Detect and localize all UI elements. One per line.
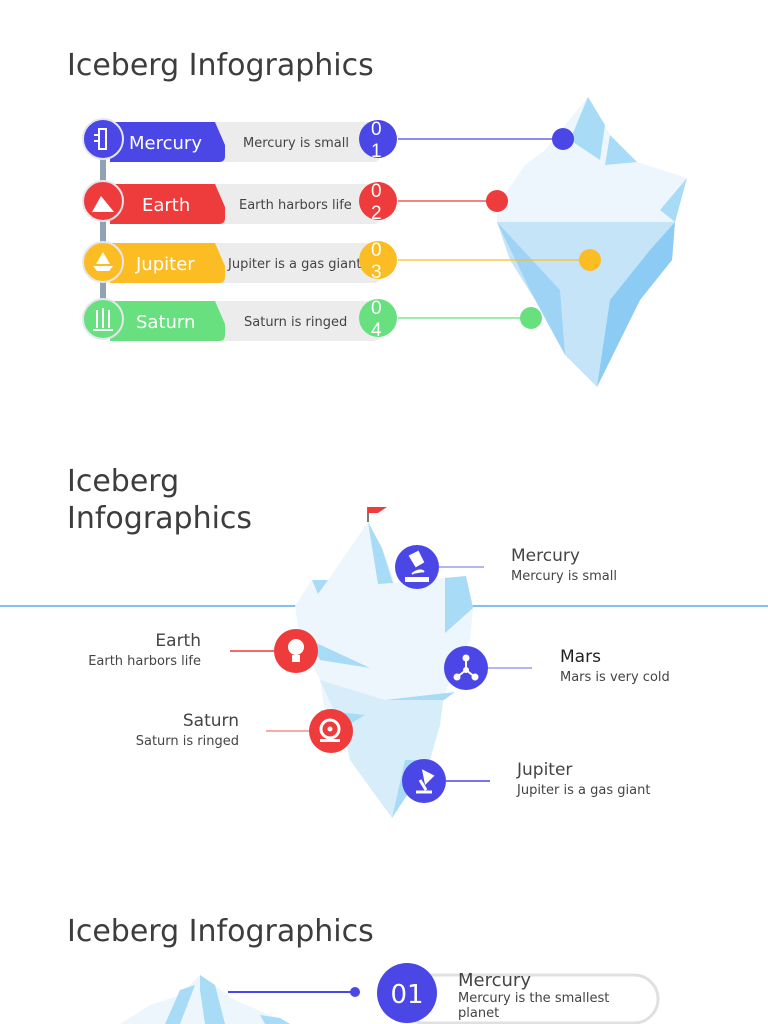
text: Mars: Mars xyxy=(560,647,601,667)
row: Mercury: 0 xyxy=(371,119,382,140)
row lines xyxy=(398,138,563,140)
row: Mercury: Mercury is small xyxy=(243,136,349,151)
row: Jupiter: Jupiter is a gas giant xyxy=(227,257,361,272)
row: Jupiter: 0 xyxy=(371,240,382,261)
water line xyxy=(0,605,768,607)
text: Jupiter: Jupiter xyxy=(517,760,572,780)
row: Saturn xyxy=(83,298,397,341)
panel: iceberg 2 xyxy=(0,507,768,818)
title 2 xyxy=(67,464,252,536)
text: Mercury 3 xyxy=(458,970,610,1021)
text: Mercury: Mercury xyxy=(511,546,580,566)
text: Earth: Earth xyxy=(155,631,201,651)
row: Jupiter: 3 xyxy=(371,262,382,283)
title 1: Iceberg Infographics xyxy=(67,48,374,83)
row: Mercury: Mercury xyxy=(129,133,202,154)
row: Earth: Earth harbors life xyxy=(239,198,352,213)
icon: bell xyxy=(309,709,353,753)
icon: molecule xyxy=(444,646,488,690)
title 2: Infographics xyxy=(67,501,252,536)
icon: bulb xyxy=(274,629,318,673)
iceberg peak xyxy=(120,975,290,1024)
icon: lamp xyxy=(402,759,446,803)
connector lines xyxy=(439,566,484,568)
row: Mercury: 1 xyxy=(371,141,382,162)
panel: iceberg 3 xyxy=(120,963,660,1024)
row: Earth: 0 xyxy=(371,181,382,202)
row: Saturn: 0 xyxy=(371,298,382,319)
text: Jupiter xyxy=(516,760,650,798)
text: Mercury xyxy=(511,546,617,584)
iceberg shape xyxy=(295,522,473,818)
row: Mercury xyxy=(83,119,397,162)
text: Saturn: Saturn xyxy=(183,711,239,731)
row: Saturn: 4 xyxy=(371,320,382,341)
panel: iceberg list 1 xyxy=(82,97,687,387)
text: Earth xyxy=(88,631,201,669)
row: Earth: Earth xyxy=(142,195,190,216)
text: Mars xyxy=(560,647,670,685)
number circle xyxy=(377,963,437,1023)
text: Jupiter: Jupiter is a gas giant xyxy=(517,783,650,798)
row: Saturn: Saturn is ringed xyxy=(244,315,347,330)
text: Mercury 3: Mercury is the smallest planet xyxy=(458,991,609,1021)
connector xyxy=(228,991,355,993)
text: Saturn: Saturn is ringed xyxy=(136,734,239,749)
pill xyxy=(400,975,658,1023)
text: Mercury 3: Mercury xyxy=(458,970,531,991)
text: Saturn xyxy=(136,711,239,749)
text: Mercury: Mercury is small xyxy=(511,569,617,584)
panel: iceberg 3: 01 xyxy=(390,980,424,1010)
title 3: Iceberg Infographics xyxy=(67,914,374,949)
row: Jupiter xyxy=(83,240,397,283)
connector line xyxy=(100,150,106,310)
row: Earth xyxy=(83,181,397,224)
row: Saturn: Saturn xyxy=(136,312,195,333)
text: Mars: Mars is very cold xyxy=(560,670,670,685)
text: Earth: Earth harbors life xyxy=(88,654,201,669)
icon: microscope xyxy=(395,545,439,589)
title 2: Iceberg xyxy=(67,464,179,499)
flag xyxy=(368,507,387,522)
row: Earth: 2 xyxy=(371,203,382,224)
row: Jupiter: Jupiter xyxy=(135,254,195,275)
iceberg 1 xyxy=(497,97,687,387)
